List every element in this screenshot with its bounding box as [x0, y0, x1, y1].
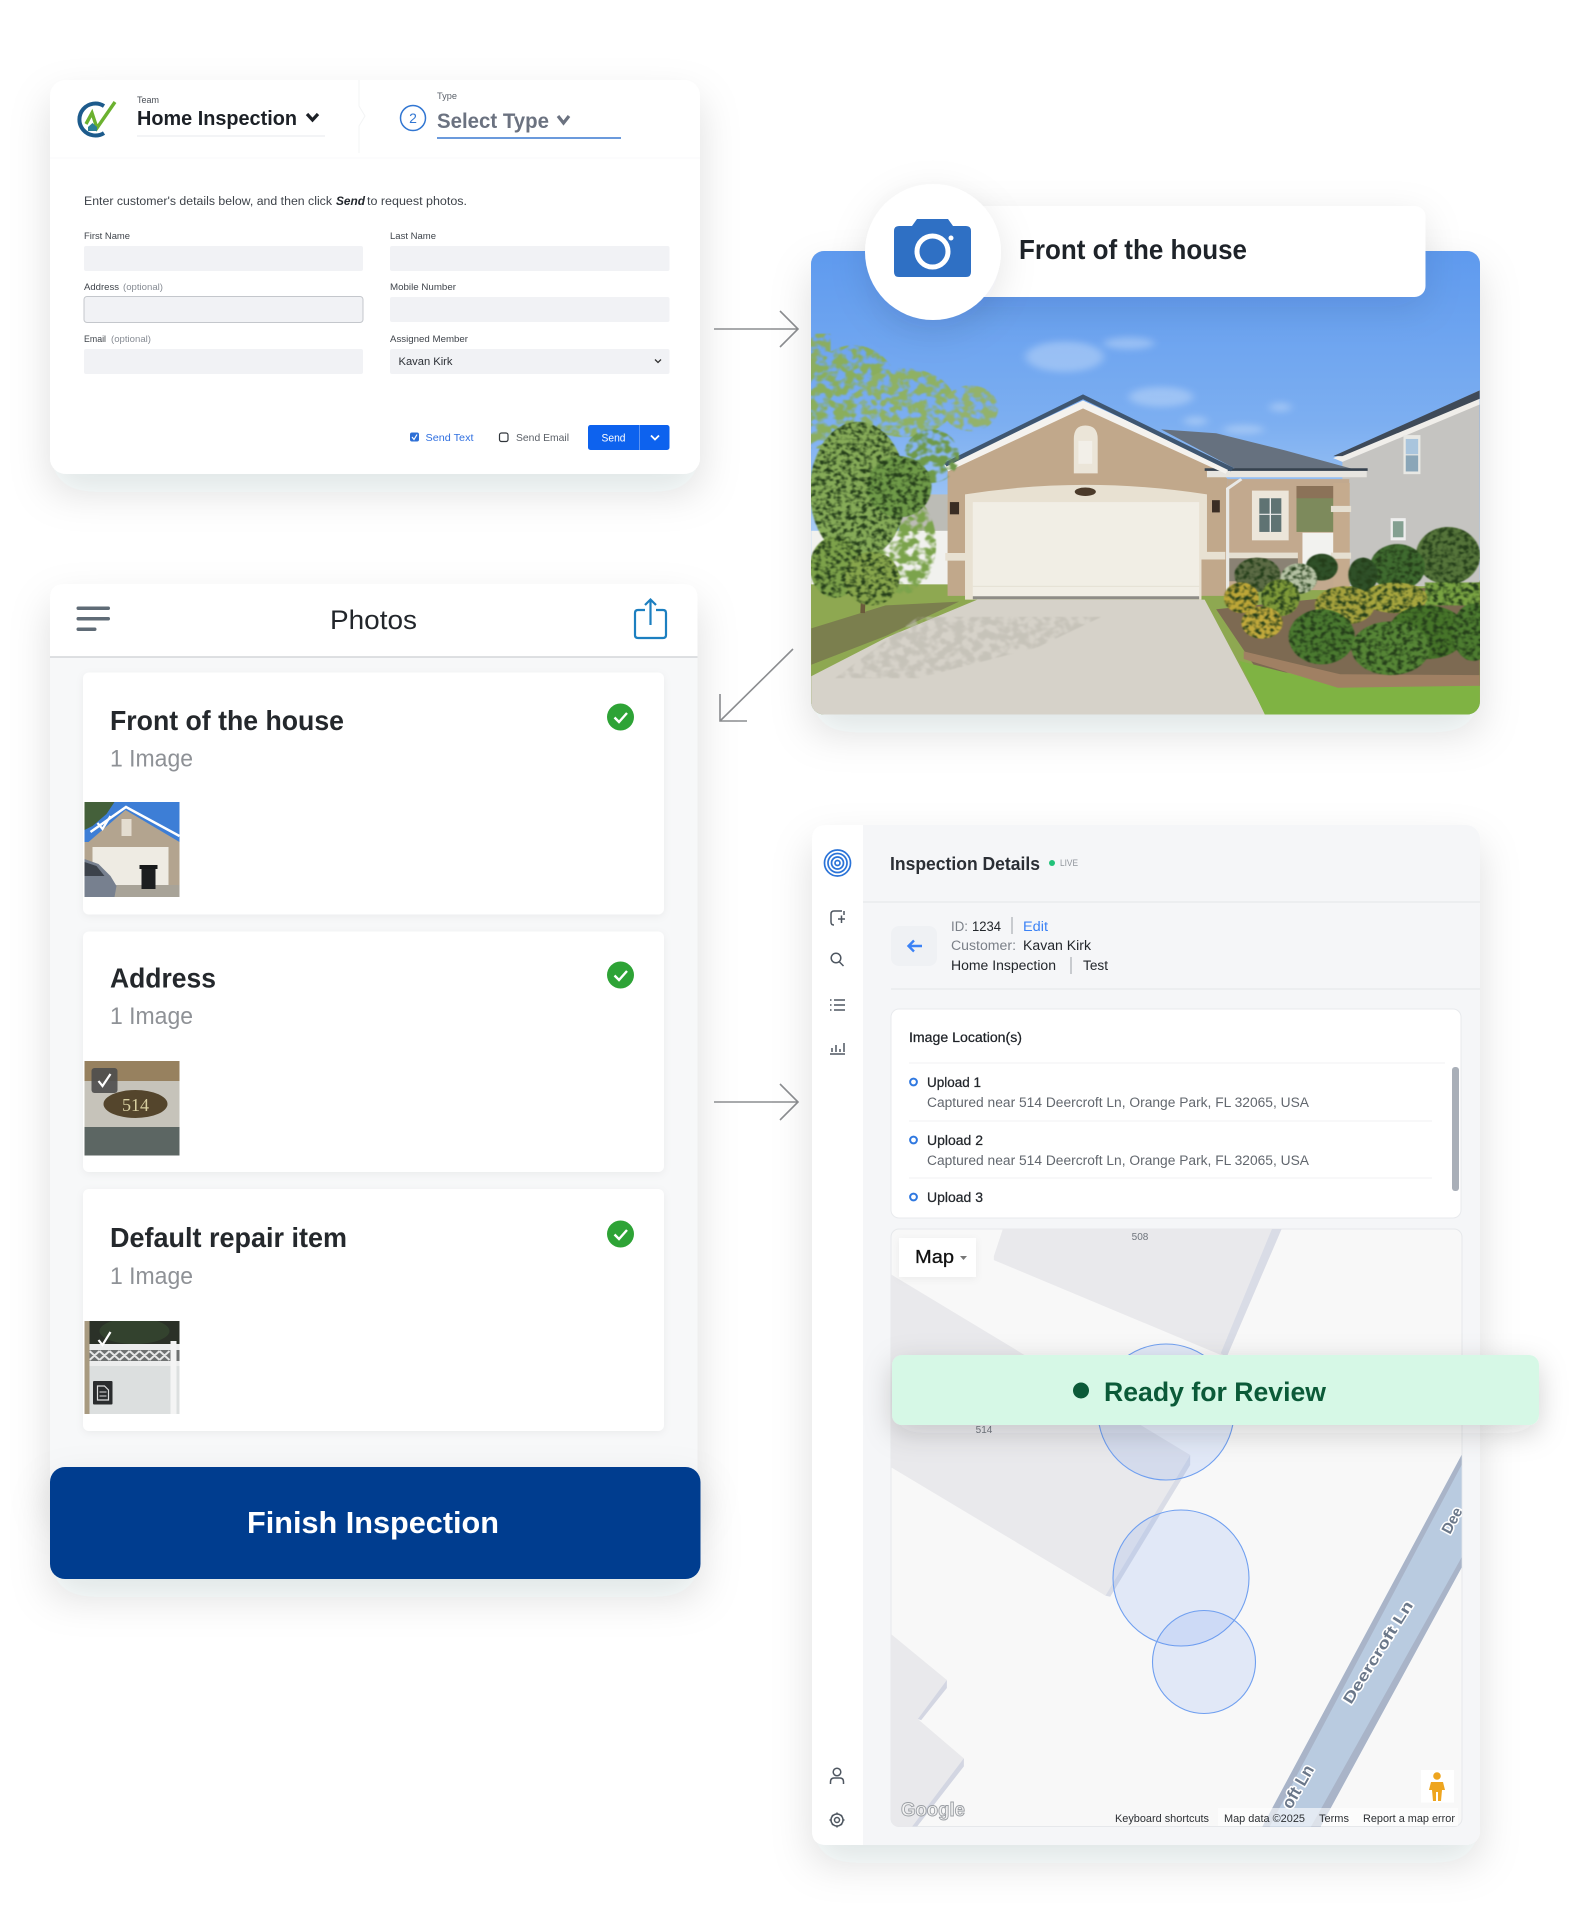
garden shrubs — [1224, 527, 1494, 675]
status banner — [892, 1355, 1539, 1425]
porch — [1296, 498, 1334, 532]
card: address — [83, 932, 664, 1172]
send button: Send — [602, 432, 626, 444]
road labels: Deercroft Ln — [1340, 1598, 1417, 1707]
form fields: First Name — [84, 231, 130, 242]
upload 1 — [910, 1075, 1309, 1110]
form fields: Last Name — [390, 231, 436, 242]
garage — [965, 485, 1225, 600]
map: 514 — [976, 1425, 993, 1436]
inspection meta: Home Inspection — [951, 958, 1056, 973]
form fields — [84, 231, 670, 374]
sidebar icons — [824, 850, 850, 1828]
form fields: (optional) — [123, 282, 163, 293]
inspection meta: 1234 — [972, 919, 1001, 934]
upload 2 — [910, 1133, 1309, 1168]
team selector: Home Inspection — [137, 107, 297, 130]
map — [891, 1224, 1466, 1835]
card: front of the house: Front of the house — [110, 705, 344, 736]
card: default repair item — [83, 1189, 664, 1431]
panel: photos list — [50, 584, 698, 1504]
card: address: Address — [110, 962, 216, 994]
arrow: form to photo — [714, 311, 798, 347]
upload 3: Upload 3 — [927, 1190, 983, 1205]
icon: company logo — [79, 102, 115, 136]
driveway — [811, 600, 1267, 716]
google watermark: Google — [901, 1800, 965, 1821]
instruction text: to request photos. — [367, 196, 467, 208]
mulch and grass — [1216, 582, 1480, 686]
inspection meta: Kavan Kirk — [1023, 938, 1091, 953]
button: finish inspection — [50, 1467, 700, 1579]
send button — [588, 425, 670, 450]
inspection meta — [891, 917, 1480, 989]
upload 1: Captured near 514 Deercroft Ln, Orange Park, FL 32065, USA — [927, 1095, 1309, 1110]
heading: Photos — [330, 605, 417, 635]
location circles — [1098, 1344, 1256, 1714]
team selector — [137, 95, 325, 136]
inspection meta: Test — [1083, 958, 1108, 973]
card: front of the house — [83, 672, 664, 914]
send options: Send Email — [516, 432, 569, 444]
icon: pegman — [1421, 1770, 1454, 1802]
arrow: list to details — [714, 1084, 798, 1120]
thumbnail: address plaque — [84, 1061, 180, 1156]
thumbnail: house — [84, 802, 180, 897]
form fields: Email — [84, 334, 106, 345]
lawn shade — [811, 602, 959, 665]
instruction text: Enter customer's details below, and then click — [84, 196, 332, 208]
card: front of the house: 1 Image — [110, 746, 193, 772]
instruction text: Send — [336, 196, 366, 208]
form fields: Assigned Member — [390, 334, 468, 345]
map attribution: Keyboard shortcuts — [1115, 1813, 1209, 1825]
status banner: Ready for Review — [1104, 1377, 1327, 1407]
upload 2: Upload 2 — [927, 1133, 983, 1148]
upload 1: Upload 1 — [927, 1075, 981, 1090]
button: finish inspection: Finish Inspection — [247, 1505, 499, 1540]
send options: Send Text — [426, 432, 474, 444]
vent and address plaque — [1074, 426, 1098, 473]
inspection meta: Edit — [1023, 919, 1048, 934]
type selector — [400, 91, 621, 138]
main house — [948, 404, 1228, 596]
panel: inspection details — [812, 825, 1539, 1845]
card: default repair item: Default repair item — [110, 1222, 347, 1253]
neighbor house — [1342, 403, 1480, 586]
send options — [410, 432, 569, 444]
road labels: oft Ln — [1278, 1762, 1318, 1812]
label bar: Front of the house — [1019, 234, 1247, 265]
photo: house — [811, 251, 1480, 714]
map shapes — [891, 1224, 1462, 1835]
header: LIVE — [1060, 858, 1078, 868]
card: image locations: Image Location(s) — [909, 1030, 1022, 1045]
map attribution — [1115, 1808, 1458, 1826]
inspection meta: ID: — [951, 919, 968, 934]
team selector: Team — [137, 95, 159, 105]
instruction text — [84, 196, 467, 208]
icon: menu — [76, 606, 110, 631]
inspection meta: Customer: — [951, 938, 1016, 953]
icon: fingerprint logo — [824, 850, 850, 876]
map attribution: Map data ©2025 — [1224, 1813, 1305, 1825]
road labels: Dee — [1439, 1505, 1466, 1537]
thumbnail: fence — [84, 1321, 180, 1414]
panel: front of the house photo — [780, 184, 1515, 726]
thumbnail: address plaque: 514 — [122, 1095, 149, 1115]
card: image locations — [891, 1009, 1461, 1218]
icon: share — [635, 600, 666, 638]
header — [863, 854, 1480, 902]
map type control — [899, 1238, 976, 1277]
map: 508 — [1132, 1232, 1149, 1243]
form fields: (optional) — [111, 334, 151, 345]
header: Inspection Details — [890, 854, 1040, 874]
card: address: 1 Image — [110, 1003, 193, 1030]
panel: customer request form — [50, 80, 700, 474]
upload 2: Captured near 514 Deercroft Ln, Orange Park, FL 32065, USA — [927, 1153, 1309, 1168]
map type control: Map — [915, 1246, 954, 1267]
arrow: photo to list — [720, 649, 793, 721]
map attribution: Report a map error — [1363, 1813, 1455, 1825]
type selector: 2 — [409, 110, 417, 126]
form fields: Mobile Number — [390, 282, 456, 293]
type selector: Select Type — [437, 109, 549, 133]
label bar — [900, 206, 1426, 297]
ground base — [811, 580, 1480, 714]
type selector: Type — [437, 91, 457, 101]
form fields: Kavan Kirk — [398, 356, 453, 368]
form fields: Address — [84, 282, 119, 293]
map attribution: Terms — [1319, 1813, 1349, 1825]
left tree — [803, 334, 998, 613]
card: default repair item: 1 Image — [110, 1263, 193, 1290]
road labels — [1278, 1505, 1466, 1812]
icon: camera badge — [865, 184, 1001, 320]
background fence and left house — [900, 494, 948, 531]
